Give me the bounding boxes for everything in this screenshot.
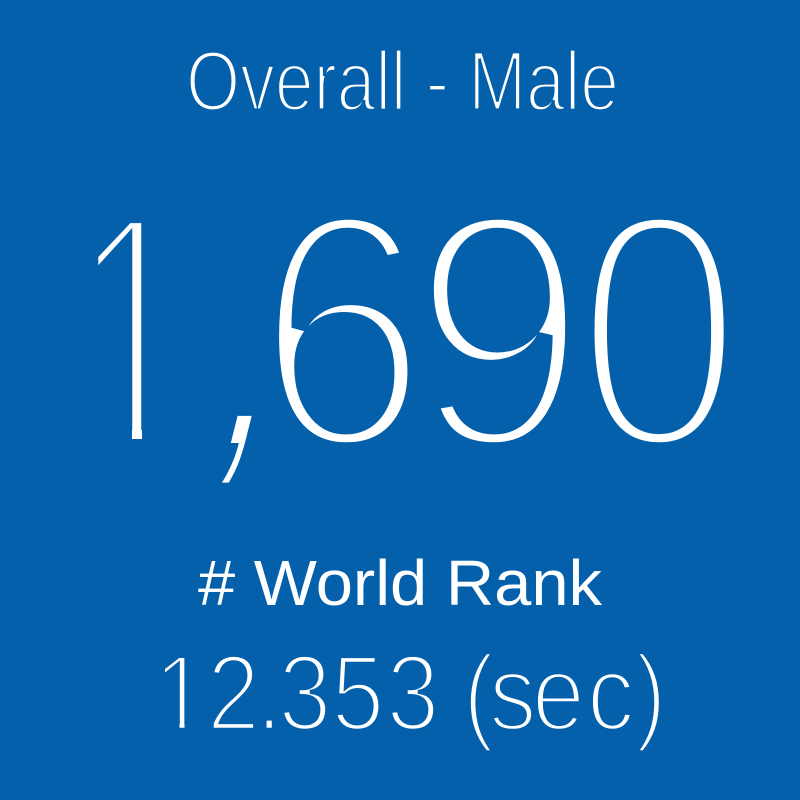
label: world rank: # World Rank [198,547,603,619]
big number: world rank value: 6 [256,142,428,519]
big number: world rank value [70,142,743,519]
title: Overall - Male [186,34,619,128]
time value: 12.353 (sec) [154,632,667,753]
big number: world rank value: 0 [576,142,743,519]
big number: world rank value: 9 [412,143,588,519]
big number: world rank value: 1 [72,143,194,519]
big number: world rank value: , [194,166,332,512]
